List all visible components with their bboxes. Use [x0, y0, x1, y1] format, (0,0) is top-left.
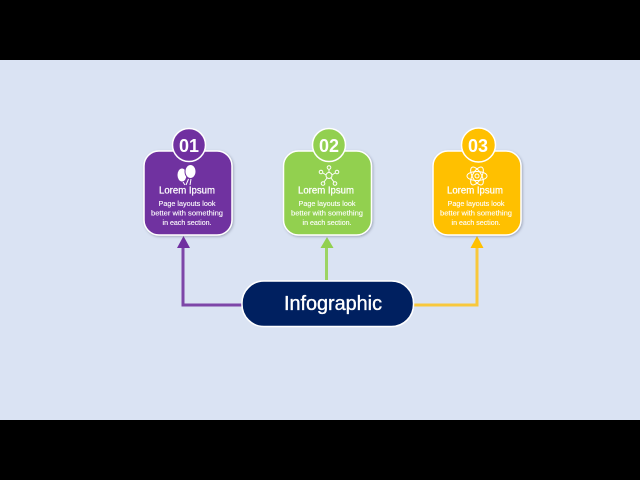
- card 01 body text: in each section.: [162, 218, 212, 227]
- card 01 number badge: 01: [179, 136, 199, 156]
- card 02 body text: Page layouts look: [298, 199, 356, 208]
- card 01 background: [144, 151, 232, 235]
- card 03 body text: better with something: [440, 208, 512, 218]
- icon: balloons: [178, 164, 196, 185]
- card 01 body text: better with something: [151, 208, 223, 218]
- arrow: purple connector to card 1: [177, 236, 243, 305]
- card 02 body text: [291, 199, 363, 227]
- arrow: yellow connector to card 3: [414, 236, 484, 305]
- card 02 body text: in each section.: [302, 218, 352, 227]
- card 02 heading: Lorem Ipsum: [298, 186, 354, 196]
- card 03 heading: Lorem Ipsum: [447, 186, 503, 196]
- icon: network nodes: [319, 166, 339, 185]
- background panel: [0, 60, 640, 420]
- panel: card 02: [284, 128, 372, 235]
- card 03 body text: Page layouts look: [448, 199, 505, 208]
- arrow: green connector to card 2: [320, 237, 334, 280]
- panel: card 01: [144, 128, 232, 235]
- central pill: Infographic: [242, 281, 414, 326]
- card 02 background: [284, 151, 372, 235]
- icon: atom: [467, 165, 487, 187]
- card 03 body text: [440, 199, 512, 227]
- card 01 body text: [151, 199, 223, 227]
- card 02 body text: better with something: [291, 208, 363, 218]
- card 01 body text: Page layouts look: [158, 199, 216, 208]
- central pill: Infographic: Infographic: [284, 293, 382, 315]
- card 03 number badge: 03: [468, 136, 488, 156]
- card 03 background: [433, 151, 521, 235]
- card 01 heading: Lorem Ipsum: [159, 186, 215, 196]
- card 03 body text: in each section.: [452, 218, 500, 227]
- card 02 number badge: 02: [319, 136, 339, 156]
- panel: card 03: [433, 128, 521, 235]
